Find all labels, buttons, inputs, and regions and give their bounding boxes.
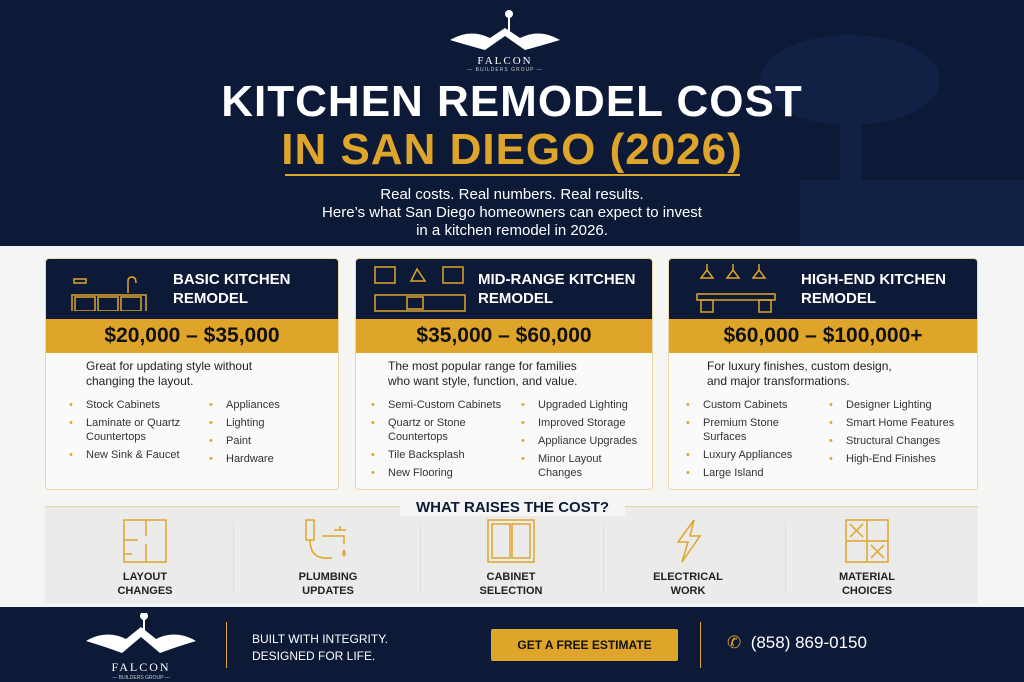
factor: material (839, 519, 895, 597)
factor: cabinet: CABINET (487, 571, 535, 583)
card: high-end: Custom Cabinets (703, 399, 787, 411)
factor: layout: CHANGES (117, 585, 172, 597)
card: mid-range (355, 258, 653, 490)
card: mid-range: Semi-Custom Cabinets (388, 399, 501, 411)
footer logo: — BUILDERS GROUP — (112, 675, 170, 681)
phone: ✆ (858) 869-0150 (727, 633, 867, 652)
card: high-end: Smart Home Features (846, 417, 954, 429)
card: mid-range: $35,000 – $60,000 (416, 324, 592, 347)
card: mid-range: Improved Storage (538, 417, 625, 429)
tagline (252, 632, 388, 663)
card: basic: Appliances (226, 399, 280, 411)
factor: electrical: ELECTRICAL (653, 571, 723, 583)
icon: basic kitchen (71, 276, 147, 311)
factor: electrical: WORK (671, 585, 705, 597)
card: basic: Lighting (226, 417, 265, 429)
logo (450, 10, 560, 73)
button: free estimate: GET A FREE ESTIMATE (517, 638, 652, 652)
card: mid-range: MID-RANGE KITCHEN (478, 271, 636, 288)
card: basic: Paint (226, 435, 251, 447)
title: KITCHEN REMODEL COST (221, 77, 803, 126)
card: mid-range: who want style, function, and value. (388, 374, 577, 388)
subtitle: Real costs. Real numbers. Real results. (380, 186, 644, 203)
button: free estimate (491, 629, 678, 661)
card: basic (45, 258, 339, 490)
factor: plumbing: UPDATES (302, 585, 354, 597)
factor: plumbing: PLUMBING (299, 571, 357, 583)
tagline: DESIGNED FOR LIFE. (252, 649, 375, 663)
card: basic: changing the layout. (86, 374, 193, 388)
heading: what raises the cost: WHAT RAISES THE COST? (416, 499, 609, 516)
factor: material: CHOICES (842, 585, 892, 597)
factor: plumbing (299, 519, 357, 597)
tagline: BUILT WITH INTEGRITY. (252, 632, 388, 646)
factor: layout (117, 519, 172, 597)
card: high-end: and major transformations. (707, 374, 850, 388)
card: basic: Laminate or Quartz (86, 417, 180, 429)
card: high-end: For luxury finishes, custom design, (707, 359, 892, 373)
card: basic: $20,000 – $35,000 (104, 324, 280, 347)
card: mid-range: Appliance Upgrades (538, 435, 637, 447)
card: mid-range: Minor Layout (538, 453, 602, 465)
card: mid-range: The most popular range for families (388, 359, 577, 373)
card: mid-range: Countertops (388, 431, 448, 443)
dividers (233, 522, 234, 592)
card: basic: Great for updating style without (86, 359, 252, 373)
card: high-end: HIGH-END KITCHEN (801, 271, 946, 288)
card: basic: Countertops (86, 431, 146, 443)
subtitle (322, 186, 702, 239)
card: high-end: Surfaces (703, 431, 746, 443)
card: basic: Stock Cabinets (86, 399, 160, 411)
factor: electrical (653, 520, 723, 597)
title: IN SAN DIEGO (2026) (281, 125, 743, 174)
card: high-end: Premium Stone (703, 417, 779, 429)
card: high-end: $60,000 – $100,000+ (723, 324, 923, 347)
card: high-end: Structural Changes (846, 435, 940, 447)
decorative palm silhouette (760, 35, 1024, 246)
logo: FALCON (477, 55, 533, 67)
card: high-end: Luxury Appliances (703, 449, 792, 461)
factor: cabinet: SELECTION (480, 585, 542, 597)
header band (0, 0, 1024, 246)
card: mid-range: Quartz or Stone (388, 417, 466, 429)
footer logo (86, 613, 196, 681)
card: high-end: REMODEL (801, 290, 876, 307)
card: mid-range: Changes (538, 467, 582, 479)
panel: what raises the cost (45, 506, 978, 603)
card: basic: New Sink & Faucet (86, 449, 180, 461)
title (221, 77, 803, 174)
logo: — BUILDERS GROUP — (467, 67, 543, 73)
subtitle: Here’s what San Diego homeowners can expect to invest (322, 204, 702, 221)
card: high-end: Designer Lighting (846, 399, 932, 411)
card: high-end: High-End Finishes (846, 453, 936, 465)
icon: mid kitchen (374, 266, 466, 312)
footer logo: FALCON (111, 660, 171, 674)
card: basic: Hardware (226, 453, 274, 465)
card: mid-range: Upgraded Lighting (538, 399, 628, 411)
card: high-end (668, 258, 978, 490)
footer (0, 607, 1024, 682)
subtitle: in a kitchen remodel in 2026. (416, 222, 608, 239)
card: mid-range: New Flooring (388, 467, 453, 479)
factor: material: MATERIAL (839, 571, 895, 583)
factor: cabinet (480, 519, 542, 597)
card: basic: REMODEL (173, 290, 248, 307)
card: high-end: Large Island (703, 467, 764, 479)
card: mid-range: REMODEL (478, 290, 553, 307)
card: mid-range: Tile Backsplash (388, 449, 465, 461)
factor: layout: LAYOUT (123, 571, 167, 583)
icon: high-end kitchen (696, 264, 776, 313)
card: basic: BASIC KITCHEN (173, 271, 291, 288)
